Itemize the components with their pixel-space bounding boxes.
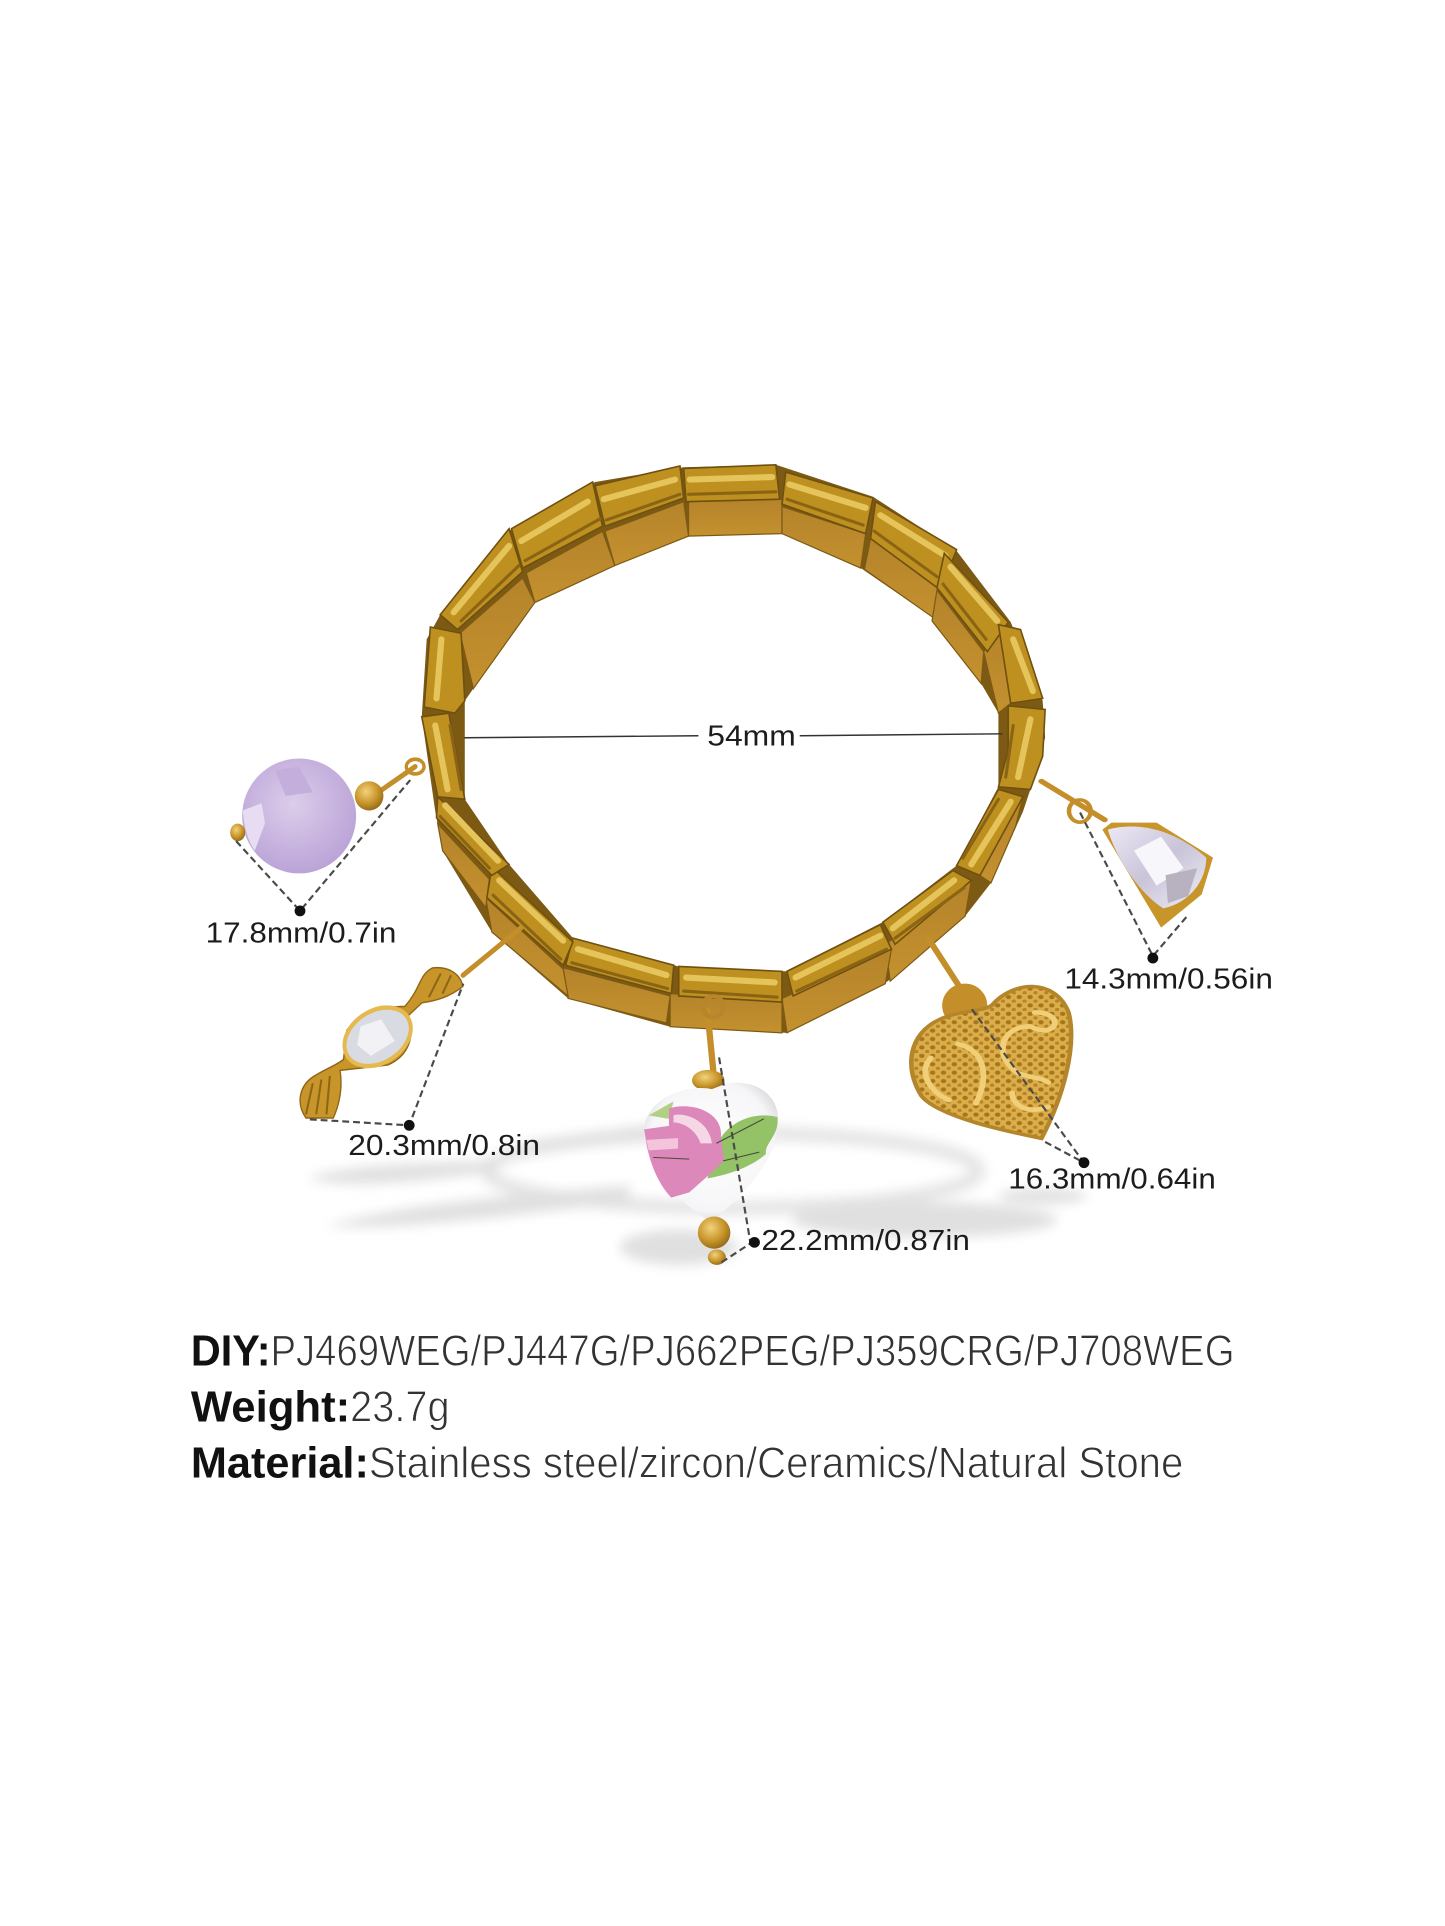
bracelet bbox=[422, 465, 1045, 1033]
band underlay bbox=[422, 465, 1045, 1033]
spec: DIY codes: PJ469WEG/PJ447G/PJ662PEG/PJ359CRG/PJ708WEG bbox=[271, 1327, 1234, 1375]
matte faces of links bbox=[438, 499, 1023, 1033]
dimension: ceramic heart bbox=[719, 1057, 970, 1264]
dimension: amethyst bbox=[206, 780, 410, 949]
spec: weight bbox=[191, 1383, 450, 1431]
dimension: teardrop: 14.3mm/0.56in bbox=[1064, 964, 1273, 996]
polished tube links bbox=[422, 465, 1045, 1002]
dimension: candy drop bbox=[310, 984, 540, 1162]
spec: weight: 23.7g bbox=[350, 1383, 450, 1431]
charm: ceramic rose heart bbox=[644, 996, 778, 1265]
dimension: candy drop: 20.3mm/0.8in bbox=[348, 1130, 540, 1162]
dimension: teardrop bbox=[1064, 813, 1273, 996]
spec: weight: Weight: bbox=[191, 1383, 350, 1431]
charm: amethyst bead bbox=[230, 759, 424, 873]
charm: zircon candy drop bbox=[300, 928, 521, 1118]
dimension: gold heart: 16.3mm/0.64in bbox=[1008, 1163, 1216, 1195]
dimension: ceramic heart: 22.2mm/0.87in bbox=[761, 1225, 970, 1257]
cast shadows under bracelet bbox=[307, 1123, 1087, 1265]
dimension line: 54mm: 54mm bbox=[707, 721, 796, 753]
charm: teardrop zircon bbox=[1041, 781, 1213, 928]
dimension: gold heart bbox=[972, 1009, 1216, 1195]
charm: textured gold heart bbox=[911, 939, 1071, 1138]
dimension: amethyst: 17.8mm/0.7in bbox=[206, 917, 396, 949]
spec: material: Material: bbox=[191, 1439, 369, 1487]
spec: DIY codes: DIY: bbox=[191, 1327, 271, 1375]
spec: material: Stainless steel/zircon/Ceramics/Natural Stone bbox=[369, 1439, 1183, 1487]
